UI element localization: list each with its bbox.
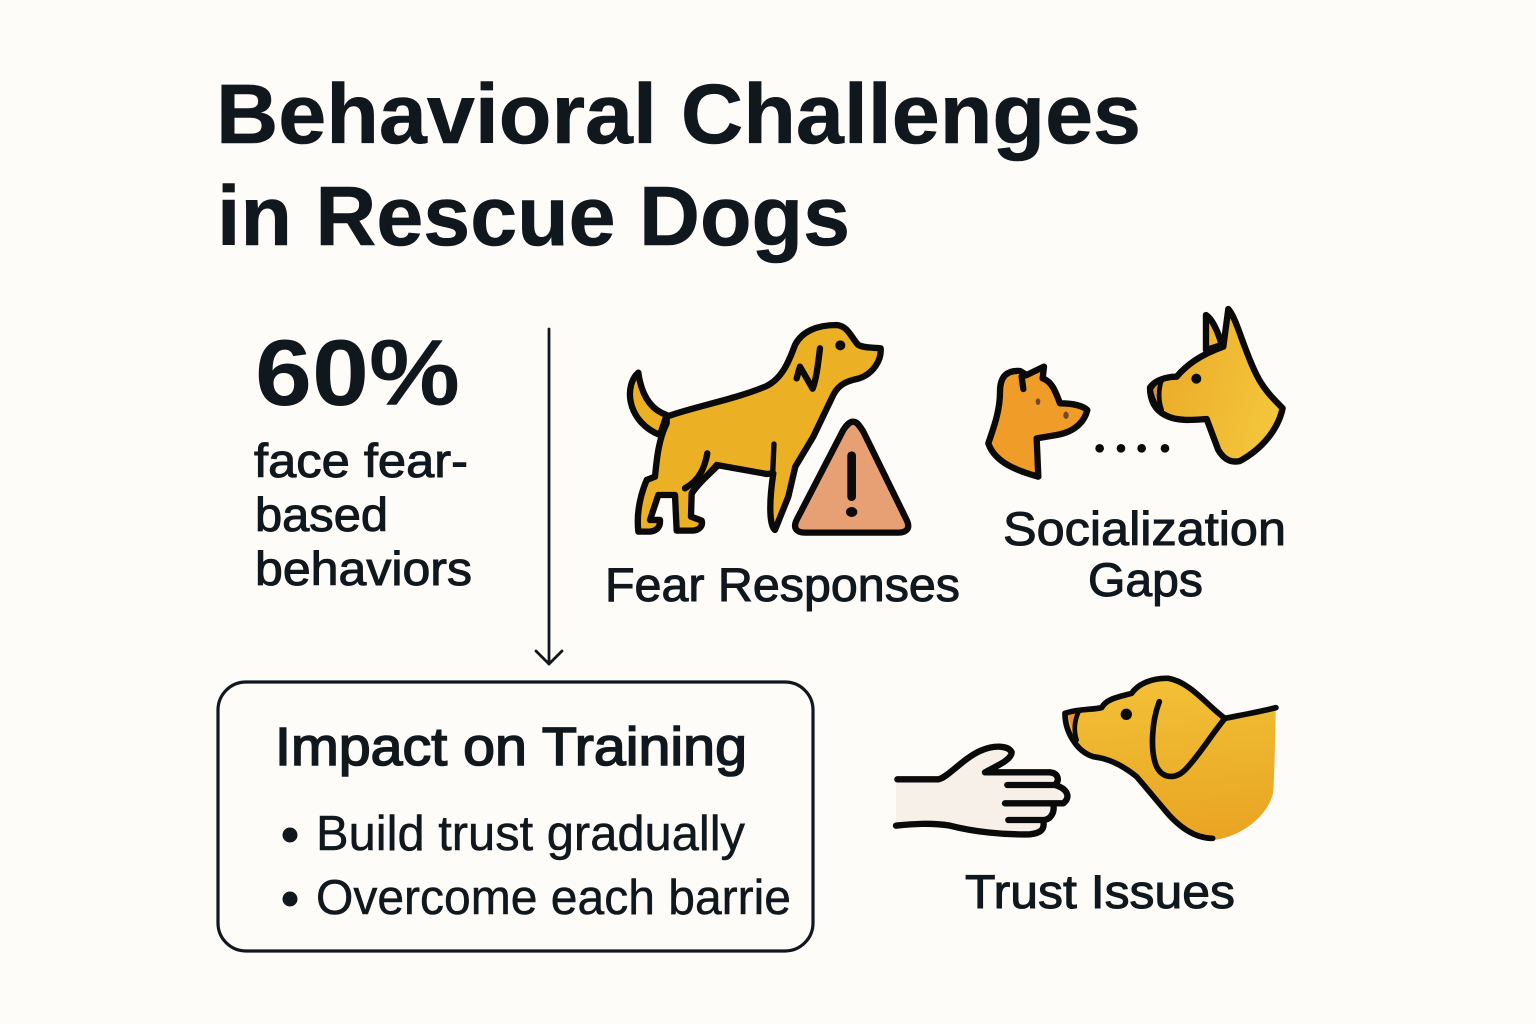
label: Socialization Gaps: Gaps: [1088, 553, 1203, 606]
small orange dog: [988, 367, 1087, 477]
statistic description: behaviors: [255, 542, 472, 595]
small dog ear line: [1022, 375, 1026, 389]
eye: [835, 340, 845, 350]
bullet: build trust: Build trust gradually: [316, 807, 745, 861]
warning triangle: [795, 422, 908, 533]
icon: small and large dog facing each other: [988, 309, 1283, 477]
title: Behavioral Challenges: [216, 67, 1141, 161]
icon: standing dog with warning triangle: [630, 325, 908, 533]
dots between the dogs: [1095, 444, 1169, 453]
statistic description: based: [255, 488, 388, 541]
large dog eye: [1191, 374, 1201, 384]
icon: hand reaching toward dog: [896, 678, 1276, 840]
statistic description: [254, 434, 472, 595]
statistic: 60%: 60%: [255, 320, 460, 425]
exclamation mark: [839, 456, 865, 497]
label: Socialization Gaps: [1003, 502, 1286, 606]
front leg line: [773, 444, 774, 474]
label: Trust Issues: Trust Issues: [965, 865, 1235, 918]
far leg: [677, 467, 717, 497]
label: Socialization Gaps: Socialization: [1003, 502, 1286, 555]
large yellow dog: [1150, 309, 1283, 462]
dog nose: [1068, 713, 1077, 728]
tail: [630, 373, 667, 435]
statistic description: face fear-: [254, 434, 468, 487]
small dog eye: [1036, 398, 1040, 405]
dog head and chest fill: [1065, 678, 1276, 840]
panel heading: Impact on Training: [275, 717, 747, 777]
hand: [896, 747, 1067, 834]
far ear: [1206, 315, 1222, 350]
dog outline: [1065, 678, 1276, 838]
dog ear: [1152, 702, 1225, 776]
large dog muzzle: [1151, 380, 1162, 410]
small dog nose: [1063, 412, 1069, 419]
leg line: [685, 453, 707, 488]
bullet: overcome barrier: Overcome each barrie: [316, 871, 791, 925]
title: [216, 67, 1141, 263]
label: Fear Responses: Fear Responses: [605, 558, 960, 611]
dog body: [638, 325, 881, 532]
dog eye: [1121, 709, 1132, 720]
arrow: down to impact box: [536, 329, 562, 664]
ear: [797, 348, 820, 389]
title: in Rescue Dogs: [217, 169, 850, 263]
panel: impact on training: [218, 682, 813, 951]
